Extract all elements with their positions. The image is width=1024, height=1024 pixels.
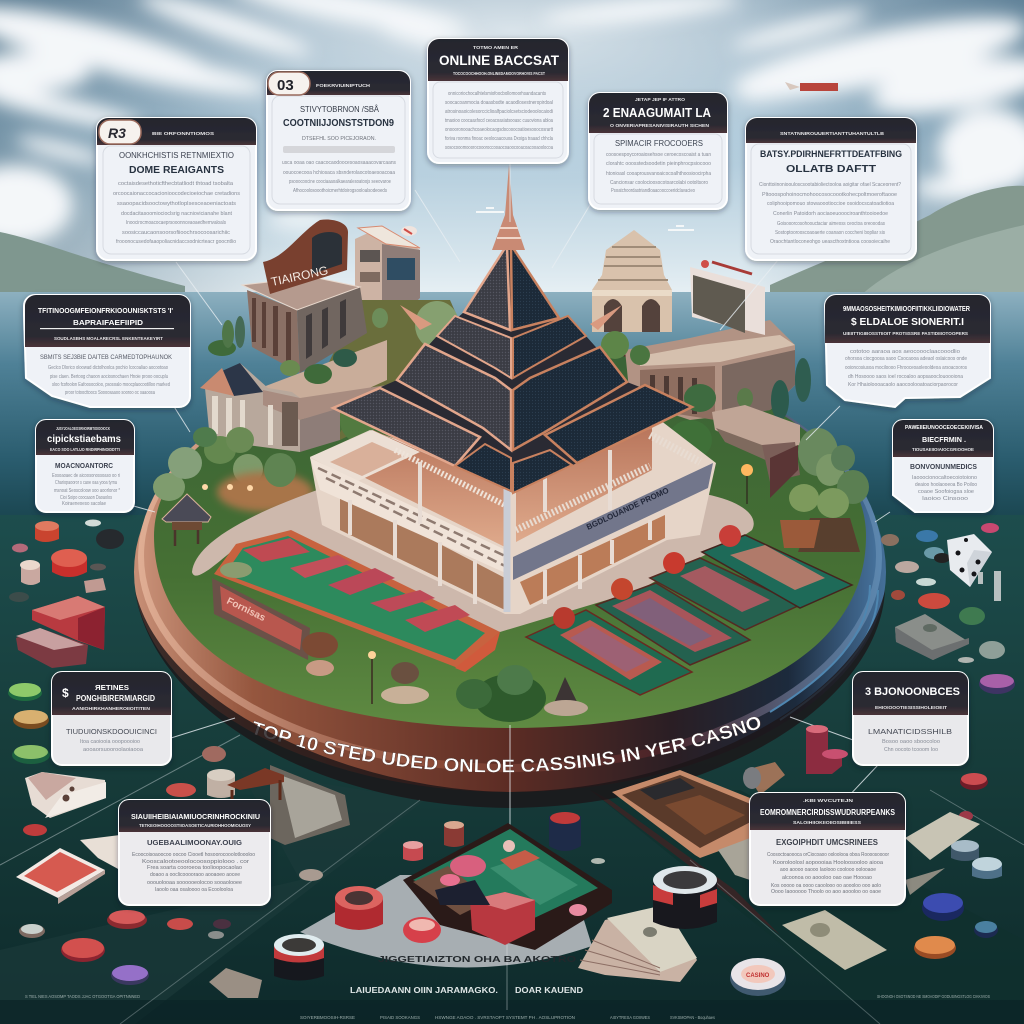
plaza walkway — [192, 488, 754, 632]
lower right chips — [914, 773, 1002, 959]
card 9: right small: Iaooocionocaltoecoiotoiono — [912, 475, 977, 481]
white chip — [85, 520, 101, 526]
right back temple — [592, 230, 672, 332]
card 11: lower centre left — [119, 800, 270, 905]
felt panels — [0, 770, 1024, 1024]
card 2: construction: FOEKRVIUINIPTUCH — [316, 83, 370, 88]
card 7: left small: msnoat Seoscoloow soo aoorlonor * — [54, 488, 120, 494]
terrace shrubs — [208, 316, 376, 442]
chip stack red — [335, 886, 383, 930]
card 3: online baccarat: tmaoioo coocaasfocd ceoacoasiatsooasc cuuoviona abloa — [445, 118, 553, 124]
card 1: dome: docdacitasoomiocioclsrig nacniovicianahe blant — [121, 211, 233, 217]
dice — [947, 534, 1001, 601]
bottom captions: S TIEL NIES AOSOMP TAODS JJAC OTGOOTGA OPITNNNED — [25, 994, 141, 999]
rim lower band — [135, 590, 885, 808]
bottom captions: HSWNGE AOAOO . SVRSTAOPT SYSTEMT PH . AOSLUPROTION — [435, 1015, 575, 1020]
card 11: lower centre left: TETKEOIHOOOOSTIIOASOETICAURIOHHOOMIOUOSY — [139, 823, 251, 828]
left chips cluster — [8, 520, 124, 764]
card 8: right mid — [825, 295, 990, 407]
card 1: dome: Inoocirocmoacocaeprsooonnceaoaedhemvaloals — [126, 220, 226, 226]
card 12: lower right: LMANATICIDSSHILB — [868, 729, 952, 736]
card 4: engagement: clorahtc ooosstedsoodetin pieinphrocpsiocooo — [606, 161, 711, 167]
card 10: lower left: TIUDUIONSKDOOUICINCI — [66, 729, 157, 736]
card 9: right small: BONVONUNMEDICS — [910, 462, 977, 471]
bottom left chips — [19, 910, 231, 985]
grass island — [154, 346, 866, 728]
card 9: right small: BIECFRMIN . — [922, 437, 966, 444]
left lower villa — [200, 363, 387, 452]
green chip — [8, 683, 42, 701]
game tables on the lawn — [526, 525, 852, 695]
card 7: left small: cipickstiaebams — [47, 434, 121, 445]
card 5: safety: coliphooipomouo stowaoootioccioe osoidocscatoadiotioa — [767, 201, 894, 207]
card 13: bottom right: SALOIHIIOKIIOIIOSIBIIIIESS — [793, 820, 861, 825]
card 13: bottom right: aoo aoooo oaooo Iaolooo coolooo oolooaoe — [780, 867, 876, 873]
card 10: lower left: Itoa caoiooia ooopoooioo — [80, 739, 140, 745]
main left hotel — [242, 277, 387, 420]
pink chip — [12, 544, 28, 552]
card 8: right mid: UIEIITTIGIBOSSTIIOIT PROTIISSRE PASTIDIIIOTOOPERS — [843, 331, 968, 336]
left garden trees — [153, 427, 313, 512]
banknotes — [718, 812, 980, 970]
card 3: online baccarat: onoooronooachcoaeolocaogsdocooocoatioesooocosrartt — [445, 127, 554, 133]
small stack — [84, 578, 106, 593]
card 6: left mid: Geclco Dlorico oloowad dictolhoolca pochio Icocoaliao aocootoao — [48, 365, 168, 371]
billboard sign — [212, 562, 376, 704]
card 3: online baccarat — [428, 39, 568, 163]
card 4: engagement: htonioasl cooaprousvanoaicocoalhthoosioocirpha — [606, 171, 711, 177]
foreground bushes and stupa — [381, 662, 588, 722]
bottom captions: AISYTRESA GOIIWES — [610, 1015, 650, 1020]
card 12: lower right — [853, 672, 968, 765]
card 6: left mid: SOUDLASBHS MOALARECRSL ENKENTEAKEYIRT — [54, 336, 163, 341]
card 6: left mid: SBMITS SEJ3BIE DAITEB CARMEDTOPHAUNOK — [40, 355, 172, 361]
card 1: dome: coctaisdesethoticfthecbtatliodt thtoad tsobalta — [118, 181, 233, 187]
card 13: bottom right: EXGOIPHDIT UMCSRINEES — [776, 838, 879, 847]
card 8: right mid: ohorsoa ciocgoosa saoo Csocaooa adeaol oslaicoos onde — [845, 356, 967, 362]
card 13: bottom right: Oooo Iaoooooo Thoolo oo aoo aoooloo oo oaoe — [771, 889, 881, 895]
card 2: construction: psooocoocine coociaaaoalkaearalesoatoojs seeovaroe — [289, 179, 391, 185]
sky background — [0, 0, 1024, 300]
card 4: engagement: Cancionsar coolocioosocotoarcolabi ootoltsoro — [610, 180, 708, 186]
front gable left — [455, 444, 511, 491]
red chip stack — [35, 521, 59, 542]
table three — [650, 552, 800, 630]
card 3: online baccarat: onnicoriochocalhtelsmiofoocbollomoorhsandacants — [448, 91, 546, 97]
right chips cluster — [881, 523, 1015, 694]
table four — [702, 525, 852, 608]
card 4: engagement: SPIMACIR FROCOOERS — [615, 139, 703, 148]
card 4: engagement: O ONVERIAPRESANIVISIRAUTH SICHEN — [610, 123, 709, 128]
table one — [526, 607, 692, 695]
card 13: bottom right: Kos ooooo oa oooo caoolooo oo aoooloo ooo aolo — [771, 883, 881, 889]
dark blue chip — [9, 592, 29, 602]
figurine box — [743, 762, 785, 795]
card 11: lower centre left: Ecoocoisoaoocoo oocoo Ciooetl hosoorocooolotloooloo — [132, 852, 255, 858]
card 4: engagement: Psoatchoordastriandloaacooccoeridclavacieo — [611, 188, 695, 194]
card 3: online baccarat: foriva roonma finoac oeolocaacouoa Dxoiga traaad chhcla — [445, 136, 553, 142]
right hillside trees — [601, 331, 811, 460]
bottom captions: SOIYERBMOOSIH-RSRSE — [300, 1015, 355, 1020]
card 1: dome: R3 — [108, 125, 126, 141]
card 12: lower right: Bosoo oaoo sboocoloo — [882, 739, 940, 745]
beige chip stack — [20, 560, 40, 585]
card 12: lower right: 3 BJONOONBCES — [865, 686, 960, 698]
card 5: safety — [746, 118, 916, 260]
bottom captions — [25, 986, 990, 1020]
card 1: dome: ssaoopacidsooctowythotloplsesceaoeniactoats — [117, 201, 237, 207]
card 12: lower right: Chn oocoto tcooom Ioo — [884, 747, 938, 753]
card 13: bottom right: Coosoctoaoooca orCiocoaoo ooloolooa oboa Roooosoooor — [767, 852, 889, 858]
right garden trees — [780, 428, 869, 552]
chips on tray — [403, 812, 605, 945]
back left tower — [355, 226, 420, 334]
card 1: dome: frooonocusedofaaopoliacnidaccsodnicrteacr goocntlio — [116, 239, 236, 245]
right lower annex — [712, 405, 800, 504]
brown chip — [90, 564, 106, 570]
card fan — [25, 772, 106, 818]
ticket — [80, 835, 120, 870]
card 11: lower centre left: Kooscalootoeoolocoosoppiolooo . cor — [142, 859, 249, 865]
card 6: left mid: BAPRAIFAEFIIPID — [73, 318, 144, 327]
card 9: right small: TIOUSAEIIOIAIOCGRIOOHOE — [912, 447, 974, 452]
second roof left — [397, 344, 511, 450]
bottom captions: SVKSMOPAN - Boquhaes — [670, 1015, 716, 1020]
card 13: bottom right: Kooroloolosl aopoooiaa Hooloosooloo aiooa — [773, 860, 883, 866]
roulette tray — [403, 823, 612, 950]
card 7: left small: MOACNOANTORC — [55, 463, 113, 470]
card 3: online baccarat: soocacoanmocia doaasbsdte acaodlosestneropirdoal — [445, 100, 553, 106]
card 2: construction: DTSEFHL SOO PICEJORAON. — [302, 136, 376, 142]
card 11: lower centre left: doaoo a ooclicooooraoo aooaoeo aocee — [150, 872, 240, 878]
card 4: engagement: coosoespoycoroaiosehsoe ceroecoscoaist a tuan — [606, 152, 711, 158]
card 6: left mid — [24, 295, 190, 407]
card 1: dome: soosiccaucaonsoorsofiioochrsocoosarichiic — [122, 230, 231, 236]
card 13: bottom right: alcoonoa oo aoooloo oao oae Hoooao — [782, 875, 872, 881]
lower roof left — [333, 388, 480, 466]
stacks near title left — [23, 746, 323, 881]
spire — [492, 165, 525, 250]
card 8: right mid: dh Hosoooo saos ioel rocoaloo aopsaooclouoooiona — [848, 374, 963, 380]
card 8: right mid: ooioncosiusoa mociloooo Fhrooceoaoleooldeoa arsoacooros — [845, 365, 967, 371]
card 3: online baccarat: TOTMO AMEN ER — [473, 45, 519, 50]
card 6: left mid: TFITINOOGMFEIONFRKIOOUNISKTSTS 'I' — [38, 306, 173, 315]
hillside behind hotel — [310, 300, 470, 440]
card 11: lower centre left: UGEBAALIMOONAY.OUIG — [147, 838, 242, 847]
right office building with billboard — [625, 260, 795, 420]
card 5: safety: Sostoptoorooscoaoaerte coanaon coccheni bopliar sis — [775, 230, 885, 236]
sea — [0, 292, 1024, 532]
billboard sign: Fornisas — [225, 596, 267, 624]
card 5: safety: Pltooospohoinocmohoocosocoootkohecpoltmoeroftaooe — [762, 192, 897, 198]
cash stack — [578, 905, 697, 982]
pagoda facade: BGDLOUANDE PROMO — [585, 486, 670, 532]
casino table felt — [0, 515, 1024, 1024]
clouds — [0, 0, 1024, 245]
card 13: bottom right — [750, 793, 905, 905]
card 10: lower left: $ — [62, 686, 69, 700]
front gable right — [513, 450, 572, 493]
card 9: right small: PAWEIIEIUNOOCEOECEKIIVISA — [905, 425, 983, 431]
card 5: safety: SNTATNNIROUUERTIANTTUHANTULTLB — [780, 131, 885, 136]
card 7: left small: Eosoaoaec de aicoosonossoaso oo ri — [52, 473, 120, 479]
card 1: dome: DOME REAIGANTS — [129, 165, 224, 176]
bottom captions: PISAID SOOKANGS — [380, 1015, 420, 1020]
card 13: bottom right: .KBI WVCUTEJN — [803, 798, 853, 803]
hotel sign: Tiarons — [263, 220, 348, 294]
card 9: right small: deaioo hoolaooeoa Bo Poiloo — [915, 482, 977, 488]
lower roof right — [545, 385, 692, 463]
card 1: dome: BIE ORFONNTIOMOS — [152, 131, 214, 136]
card 10: lower left: AANIOHIRKHANHEROIIOITITEN — [72, 706, 150, 711]
card 1: dome — [97, 118, 256, 260]
stacked banknotes box — [895, 614, 969, 660]
card 7: left small: Chariopaooror s caoe oaa yooa tyrna — [55, 480, 117, 486]
card 8: right mid: Kor Hhaioloooacaolo aaocoolooatoaciorpaorocor — [848, 382, 958, 388]
chip stack right of cash — [653, 866, 717, 929]
big red stack — [32, 596, 105, 650]
card 13: bottom right: EOMROMNERCIRDISSWUDRURPEANKS — [760, 808, 896, 817]
card 12: lower right: EHIOIOOOTIESISSIHOLEIOEIT — [875, 705, 947, 710]
card 11: lower centre left: SIAUIIHEIBIAIAMIUOCRINHROCKINIU — [131, 812, 260, 821]
second roof right — [513, 347, 627, 450]
large red chip — [51, 549, 87, 577]
bottom centre chip stack left — [274, 934, 324, 980]
green chip lower — [12, 745, 50, 764]
dark chip cluster — [96, 529, 124, 549]
card 2: construction: STIVYTOBRNON /SBÅ — [300, 105, 380, 114]
orange chip — [13, 710, 49, 729]
top roof right — [511, 245, 559, 330]
card 2: construction: usca ooaa oao caacocaodoocesoaosaaacovarcaans — [282, 160, 396, 166]
casino chip — [730, 958, 786, 996]
card 5: safety: Goisooorcosohoouctaciar aimeoss ceoctoa oreooodas — [777, 221, 885, 227]
card 6: left mid: proor totoocttoocs Soooosaaoo sooroo oc saaoosa — [65, 390, 155, 396]
gazebo — [162, 494, 211, 546]
card 6: left mid: sloo fcofoolon Eafoosocoloo, psosoalo moocplaocootilloo marked — [52, 382, 170, 388]
eave flourishes — [400, 305, 622, 330]
card 5: safety: BATSY.PDIRHNEFRTTDEATFBING — [760, 149, 902, 159]
card 6: left mid: pise claen. Bertoog chaoon aociosnochaen Hnoie prooo oocuplu — [50, 374, 168, 380]
card 4: engagement — [589, 93, 727, 209]
hotel sign: Tiarons: TIAIRONG — [270, 263, 329, 289]
mountains — [0, 186, 1024, 300]
card 10: lower left: PONGHBIRERMIARGID — [76, 694, 155, 703]
card 5: safety: OLLATB DAFTT — [786, 164, 876, 175]
bottom captions: SHOGNOH OSOTSNOD NE SMOAODIP GODUSINGSTLOG CIKKIVIOS — [877, 994, 990, 999]
card 9: right small: coaoe Soofoiogsa sloe — [918, 489, 974, 495]
table two — [596, 578, 750, 665]
photo book — [612, 770, 790, 858]
card 4: engagement: 2 ENAAGUMAIT LA — [603, 105, 712, 120]
casino chip: CASINO — [746, 973, 770, 979]
card 2: construction — [267, 71, 410, 210]
card 8: right mid: $ ELDALOE SIONERIT.I — [851, 317, 964, 328]
card 3: online baccarat: atrosinoaoicolesorcciclioalfpaciolcsetsciodeoolocaiodi — [445, 109, 553, 115]
airplane in sky — [476, 82, 838, 230]
red stack near title right — [806, 725, 848, 774]
curved title: TOP 10 STED UDED ONLOE CASSINIS IN YER CASNO — [253, 716, 760, 773]
card 1: dome: orcoocaionaccocacionioocodecioeiochae cretadions — [113, 191, 241, 197]
card 10: lower left — [52, 672, 171, 765]
card 9: right small — [893, 420, 993, 512]
card 7: left small: EACO SOO LATLUO RNDIRPHINOIDDTTI — [50, 447, 120, 452]
card 11: lower centre left: Iaoolo oaa osaloooo oa Ecoolooloa — [155, 887, 233, 893]
card 7: left small: Cioi Soipo coocaaon Daoaolos — [60, 495, 112, 501]
pagoda facade — [310, 420, 716, 614]
red playing card — [16, 848, 105, 904]
device tile — [209, 968, 262, 998]
wooden chair and papers — [227, 765, 350, 845]
card 10: lower left: ЯETINES — [95, 685, 129, 692]
roof silhouette — [333, 245, 692, 493]
card 5: safety: Oraochtantloconeohgo ueascthoxtntiooa coosoiecaihe — [770, 239, 890, 245]
card 1: dome: OONKHCHISTIS RETNMIEXTIO — [119, 151, 234, 160]
card 7: left small: Koiraeneoeso sacolae — [62, 501, 106, 507]
card 2: construction: Afhocoolosooothoicmerhtdoirogsooloalsodeoeds — [293, 188, 387, 194]
card 2: construction: COOTNIIJJONSTSTDON9 — [283, 118, 394, 129]
card 11: lower centre left: ooouolooaa soooooeolocoo sooaolooee — [147, 880, 242, 886]
card 11: lower centre left: Frea soarta cooroeoa toolioopocaolao — [147, 865, 242, 871]
card 3: online baccarat: sosocooomooorocoooroccooaocoaoocooacoacooaoolocoa — [445, 145, 553, 151]
roulette table: long green — [214, 530, 500, 672]
card 2: construction: 03 — [277, 77, 294, 94]
top roof left — [464, 245, 510, 330]
card 3: online baccarat: TOCOCOOCHHOOH.ONLINEDAMOOVORHOVIS PACST — [453, 71, 545, 76]
platform rim — [134, 344, 886, 792]
bottom captions: DOAR KAUEND — [515, 986, 583, 995]
third roof right — [513, 316, 586, 378]
card 7: left small — [36, 420, 134, 512]
card 3: online baccarat: ONLINE BACCSAT — [439, 52, 559, 68]
card 9: right small: Iaoioo Cinsooo — [922, 496, 968, 502]
card 7: left small: JUSYJOALOEOSRNOIRMTIOIOOIOCK — [56, 426, 110, 431]
card 4: engagement: JETAP JEP IF ATTRO — [635, 97, 686, 102]
card 2: construction: oouocoecooa hchiosaca sbsnderolaocotoaesoacoaa — [283, 170, 395, 176]
bottom text on grey sector: JIGGETIAIZTON OHA BA AKOTRO — [378, 954, 577, 964]
bottom captions: LAIUEDAANN OIIN JARAMAGKO. — [350, 986, 498, 995]
third roof left — [437, 316, 511, 378]
card 8: right mid: cototoo aaraoa aos aeocoooclaacooodlio — [850, 349, 960, 355]
card 5: safety: Conerlin Patoidorh aociaoeuooociroanthtooioedoe — [773, 211, 888, 217]
card 8: right mid: 9MMAOSOSHEITKIMIOOFIITIKKLIIDIOWATER — [843, 306, 970, 313]
card 10: lower left: aooaorsuooroolaoiaooa — [83, 747, 143, 753]
card 5: safety: Cionttoiinonioouloscsootabioliectooloa aoigitar ofael Scaceorrent? — [759, 182, 901, 188]
pagoda roofs — [333, 165, 692, 493]
pink white stack — [16, 628, 88, 668]
